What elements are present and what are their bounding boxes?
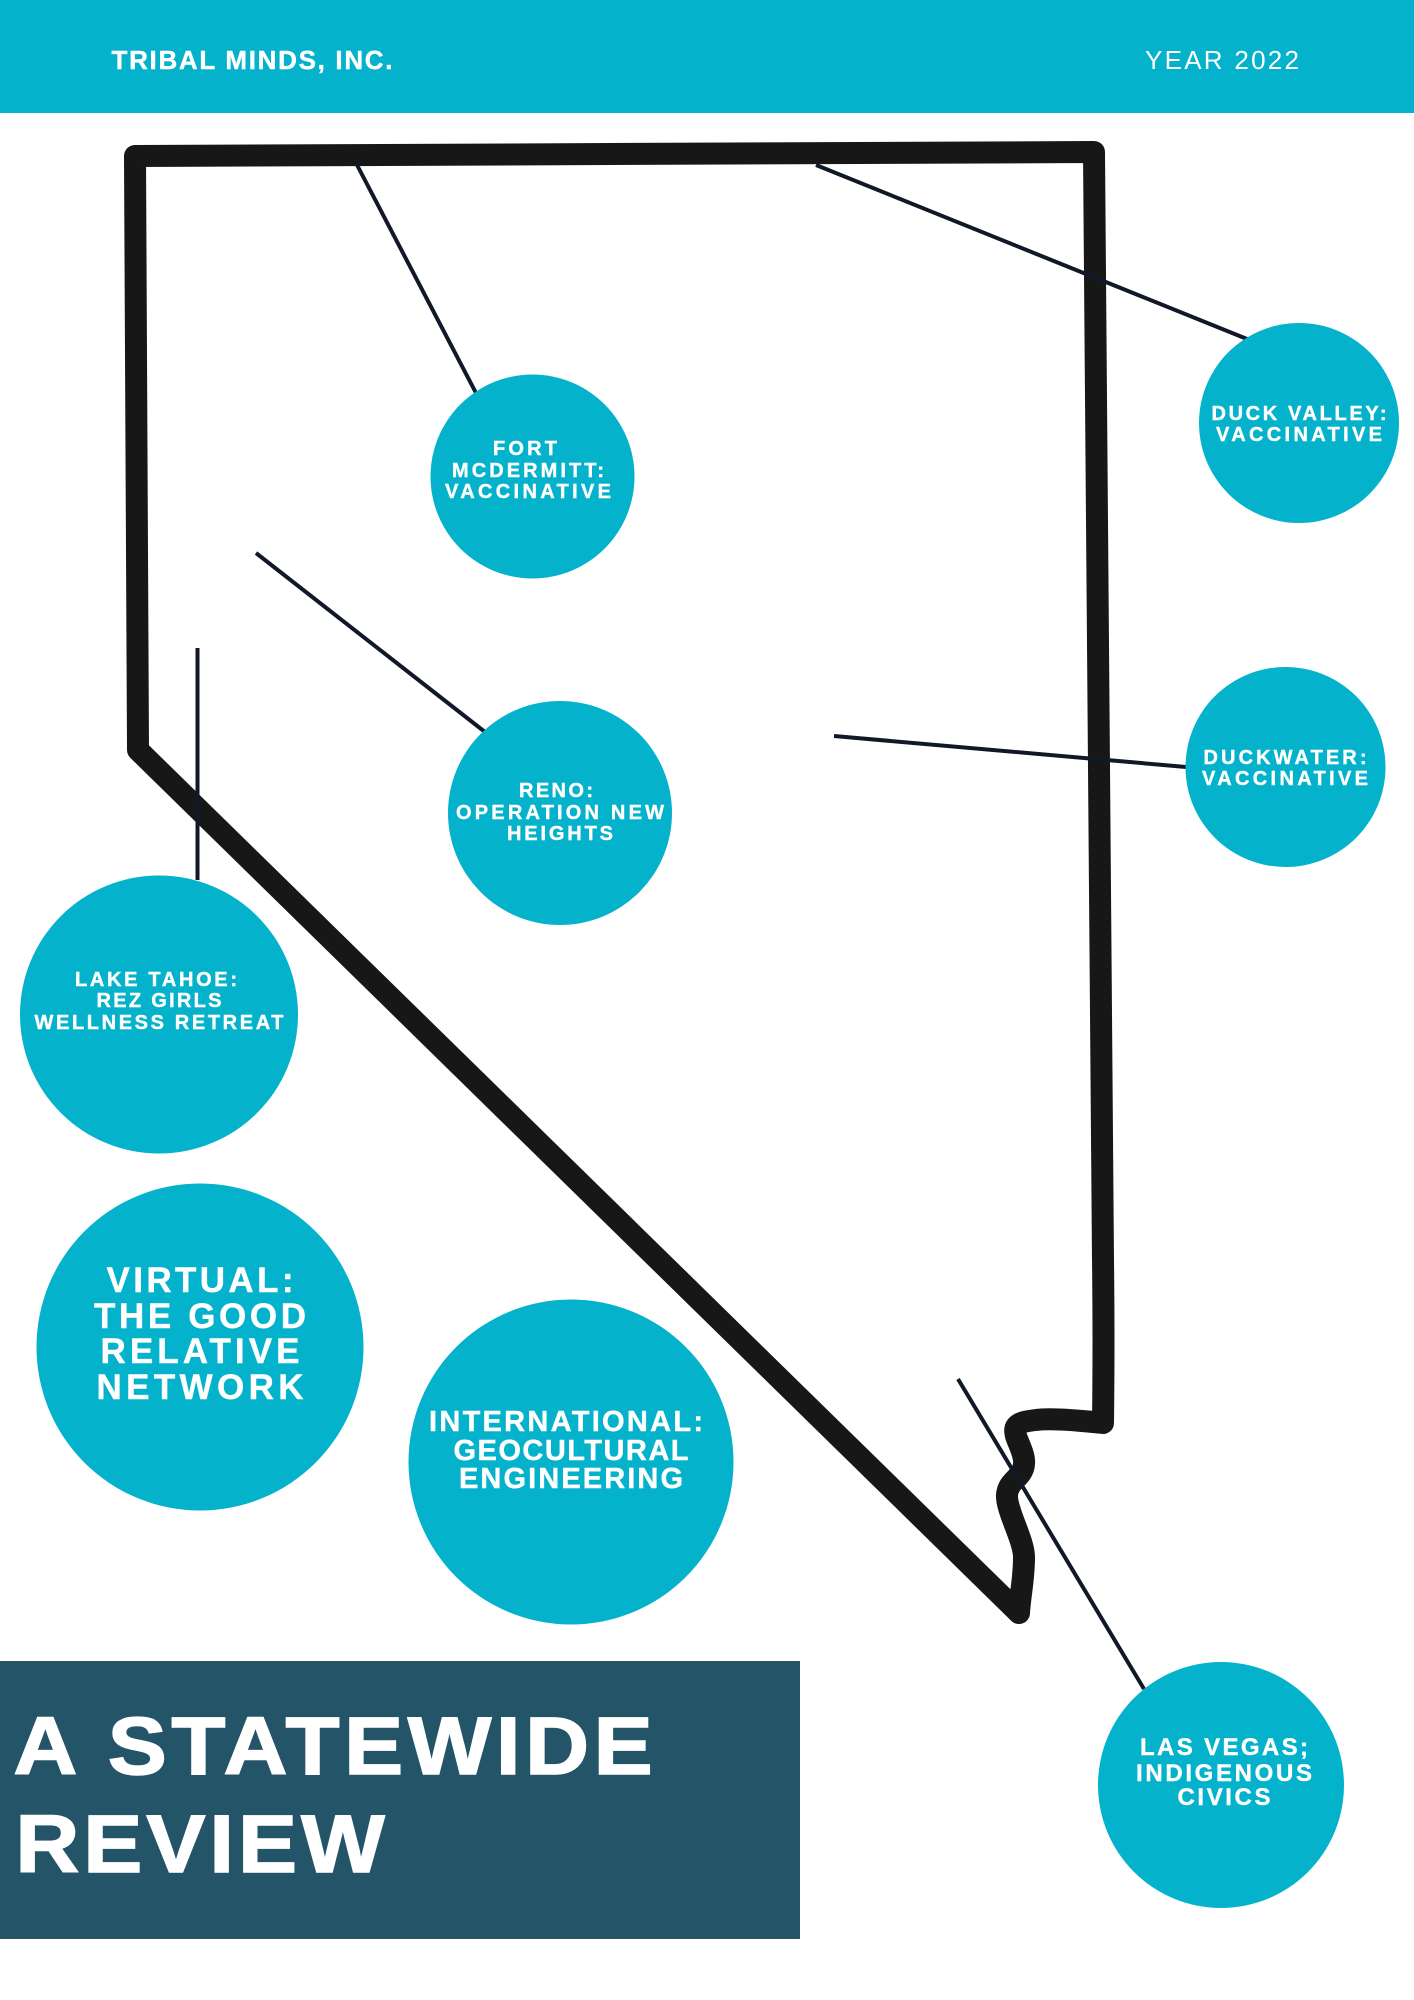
callout: Las Vegas: INDIGENOUS [1136,1760,1312,1787]
callout: Virtual [36,1184,364,1510]
callout: Duck Valley: VACCINATIVE [1216,424,1382,446]
callout: Duck Valley [1199,323,1399,523]
callout: Lake Tahoe: REZ GIRLS [96,990,222,1012]
callout: Fort McDermitt [430,374,634,578]
callout: Reno: RENO: [519,780,593,802]
callout: Las Vegas: CIVICS [1178,1784,1270,1811]
callout: International [408,1300,734,1624]
title: A STATEWIDE [13,1701,653,1792]
callout: Fort McDermitt: FORT [493,438,557,460]
connector: Fort McDermitt [356,163,476,393]
callout: International: ENGINEERING [459,1463,683,1495]
connector: Reno [256,553,485,732]
year label: YEAR 2022 [1145,45,1299,75]
callout: Fort McDermitt: VACCINATIVE [445,481,611,503]
connector: Lake Tahoe [196,648,200,880]
callout: Virtual: NETWORK [96,1368,304,1407]
callout: Reno: OPERATION NEW [456,802,664,824]
organization name: TRIBAL MINDS, INC. [112,45,392,75]
callout: International: GEOCULTURAL [454,1435,688,1467]
connector: Las Vegas [958,1379,1144,1689]
title banner [0,1661,800,1939]
connector: Duck Valley [816,165,1247,339]
title [13,1701,653,1890]
callout: Virtual: THE GOOD [94,1297,306,1336]
title: REVIEW [15,1799,385,1890]
header bar [0,0,1414,113]
callout: Virtual: VIRTUAL: [106,1261,294,1300]
callout: Fort McDermitt: MCDERMITT: [452,460,604,482]
callout: Duckwater: DUCKWATER: [1204,747,1366,769]
callout: Las Vegas: LAS VEGAS; [1140,1734,1308,1761]
map outline: Nevada [135,152,1104,1613]
callout: Lake Tahoe [20,876,298,1154]
connector: Duckwater [834,736,1186,767]
callout: Reno [448,701,672,925]
callout: Lake Tahoe: LAKE TAHOE: [75,969,237,991]
callout: Duckwater: VACCINATIVE [1202,768,1368,790]
callout: Virtual: RELATIVE [100,1332,300,1371]
callout: Duckwater [1186,667,1386,867]
callout: International: INTERNATIONAL: [429,1406,703,1438]
callout: Las Vegas [1098,1662,1344,1908]
callout: Lake Tahoe: WELLNESS RETREAT [34,1012,284,1034]
callout: Duck Valley: DUCK VALLEY: [1212,403,1386,425]
callout: Reno: HEIGHTS [507,823,613,845]
